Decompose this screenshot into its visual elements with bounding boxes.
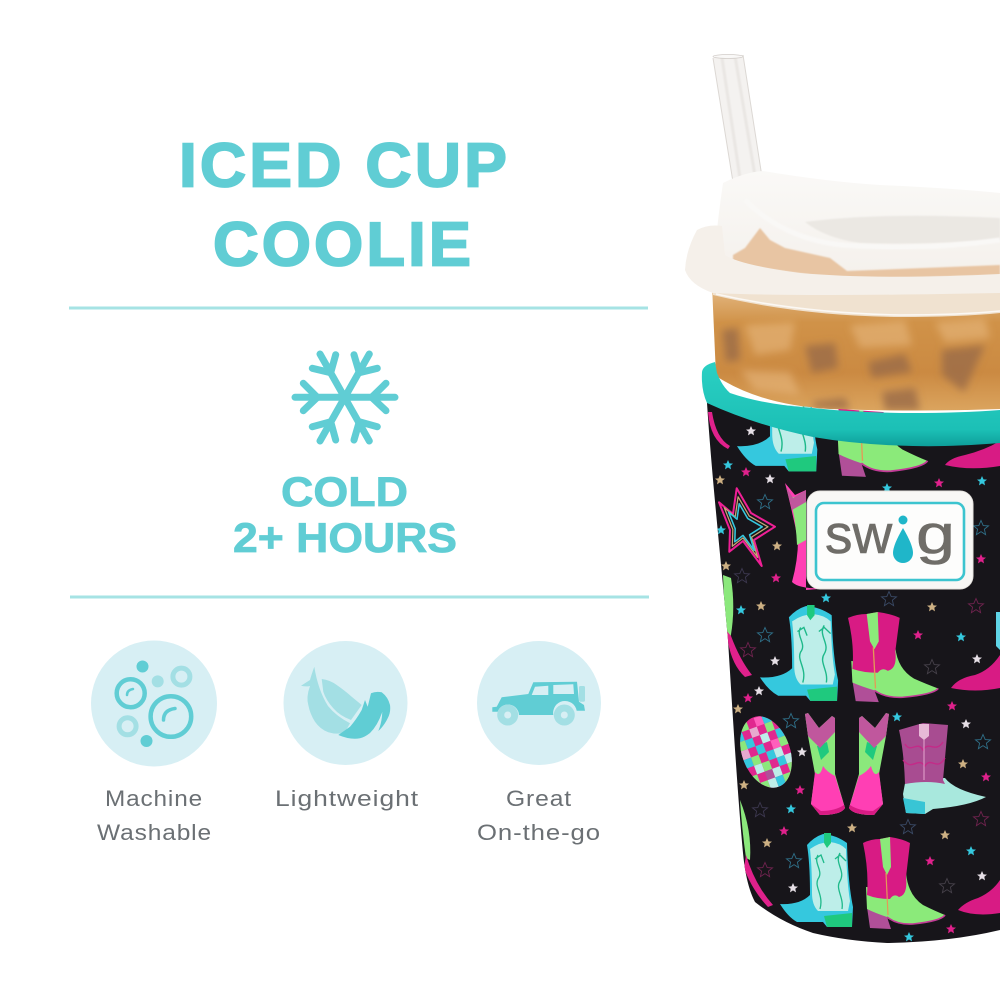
- coffee seen through lid: [733, 228, 1000, 279]
- cold duration text: 2+ HOURS: [233, 514, 457, 561]
- label: lightweight: Lightweight: [275, 786, 419, 811]
- title: COOLIE: [213, 210, 474, 280]
- iced coffee: [712, 285, 1000, 410]
- boot print pattern: [708, 368, 1000, 941]
- coolie body: [707, 368, 1000, 943]
- cold duration text: COLD: [281, 468, 408, 515]
- title: ICED CUP: [179, 132, 510, 200]
- swig logo badge: sw: [825, 503, 892, 565]
- lid recess: [805, 216, 1000, 244]
- icon: lightweight feather: [284, 641, 408, 765]
- label: great on-the-go: [477, 786, 601, 845]
- decorative print: [708, 368, 1000, 929]
- teal coolie band: [702, 362, 1000, 446]
- lid skirt: [713, 270, 1000, 317]
- swig logo badge: g: [916, 503, 955, 565]
- large outlined star: [719, 488, 775, 566]
- straw: [713, 54, 762, 182]
- icon: machine washable bubbles: [91, 640, 217, 766]
- label: great on-the-go: On-the-go: [477, 820, 601, 845]
- swig logo badge: i: [900, 528, 906, 559]
- label: machine washable: Washable: [97, 820, 212, 845]
- icon: snowflake: [295, 354, 395, 441]
- lid dome: [712, 171, 1000, 285]
- scattered stars: [715, 426, 991, 941]
- swig logo badge: [807, 491, 973, 589]
- lid rim: [685, 226, 1000, 295]
- product photo: iced cup with coolie: [685, 54, 1000, 943]
- icon: on-the-go vehicle: [477, 641, 601, 765]
- label: great on-the-go: Great: [506, 786, 572, 811]
- cold duration text: [233, 468, 457, 561]
- disco ball: [740, 716, 792, 788]
- label: machine washable: Machine: [105, 786, 203, 811]
- title: [179, 132, 510, 280]
- plastic lid: [685, 171, 1000, 317]
- label: machine washable: [97, 786, 212, 845]
